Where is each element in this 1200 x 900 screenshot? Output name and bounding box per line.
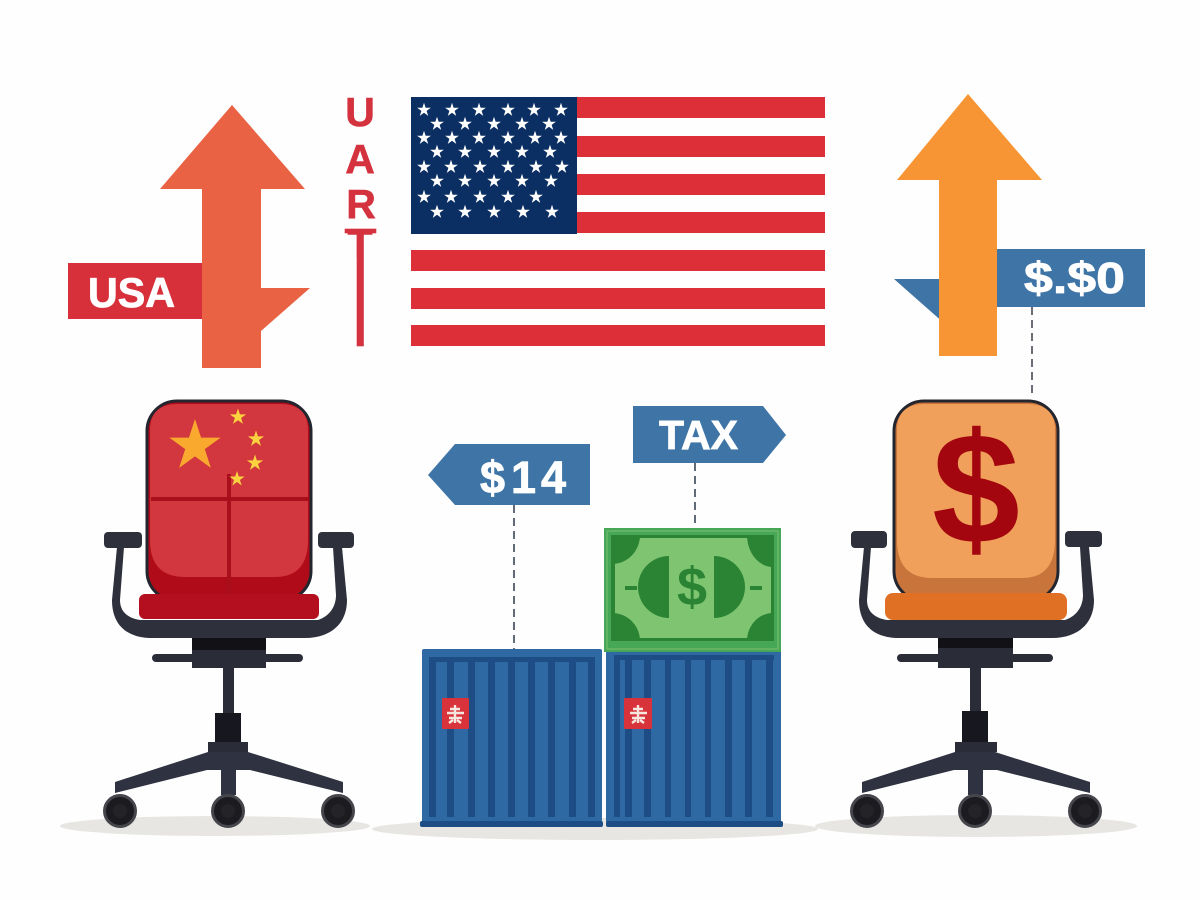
chair: China flag	[104, 401, 354, 826]
chair base	[852, 668, 1100, 826]
chair back	[147, 401, 311, 601]
price label: $.$0: $.$0	[1024, 254, 1125, 303]
price label: $.$0	[995, 249, 1145, 307]
American flag	[411, 97, 825, 346]
price sign: $14: $14	[480, 452, 566, 503]
shipping container: left	[420, 649, 603, 827]
chair back: $	[932, 401, 1020, 577]
vertical word: UART: R	[346, 181, 376, 227]
price tag triangle behind orange arrow	[894, 279, 945, 324]
red tag	[624, 698, 652, 729]
chair back	[894, 401, 1058, 601]
dashed connector: TAX sign to bill	[694, 463, 696, 527]
red tag	[442, 698, 469, 729]
arrow: orange up arrow	[897, 94, 1042, 356]
tax sign: TAX	[659, 412, 738, 458]
tax sign	[633, 406, 786, 463]
vertical word: UART	[345, 89, 376, 346]
shipping container: right	[606, 650, 783, 827]
ground shadows	[60, 815, 1137, 840]
arrow: red-orange up arrow	[160, 105, 310, 368]
vertical word: UART: T	[347, 221, 373, 267]
chair seat	[139, 594, 319, 619]
chair mechanism	[897, 638, 1053, 668]
chair arms	[851, 531, 1102, 638]
dollar bill: $	[677, 557, 707, 617]
dashed connector: price label to chair	[1031, 307, 1033, 396]
USA label: USA	[88, 269, 175, 316]
chair: dollar sign	[851, 401, 1102, 826]
dollar bill	[604, 528, 781, 652]
vertical word: UART: A	[345, 136, 375, 182]
dashed connector: $14 sign to container	[513, 505, 515, 649]
price sign: $14	[428, 444, 590, 505]
chair arms	[104, 532, 354, 638]
chair mechanism	[152, 638, 303, 668]
USA label	[68, 263, 204, 319]
vertical word: UART: U	[345, 89, 375, 135]
chair base	[104, 668, 354, 826]
chair seat	[885, 593, 1067, 620]
